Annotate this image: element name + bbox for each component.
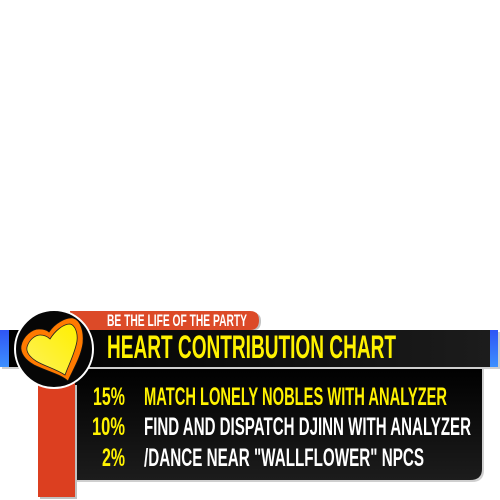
red column [38, 383, 77, 499]
title bar [0, 330, 500, 369]
row 2: 10% [92, 413, 125, 441]
subtitle: BE THE LIFE OF THE PARTY [107, 311, 247, 330]
panel: main list [75, 367, 484, 482]
row 3: 2% [102, 444, 125, 472]
row 1: 15% [93, 383, 125, 411]
red subtitle tab [70, 311, 261, 330]
icon: heart badge [15, 310, 93, 388]
